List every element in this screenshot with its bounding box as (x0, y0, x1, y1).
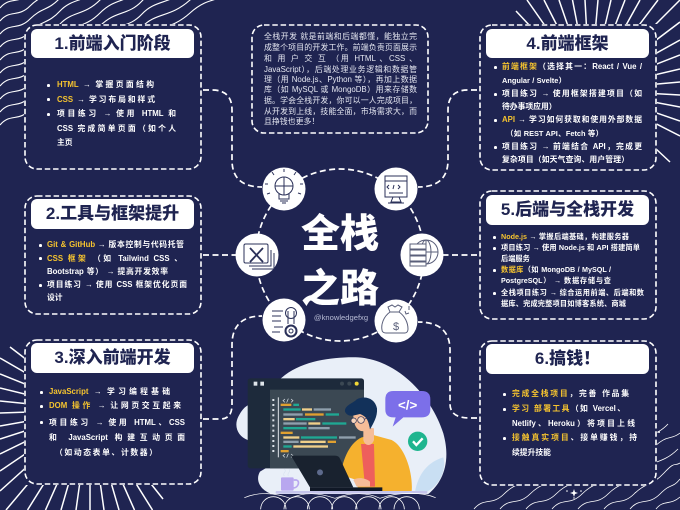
heading: 1 (31, 29, 194, 58)
heading: 6 (486, 344, 649, 374)
plant (415, 457, 444, 493)
panel: 1 frontend basics (24, 24, 202, 170)
panel: 5 backend and full stack: 项目练习 → 使用 Node.js 和 API 搭建简单 (501, 243, 640, 252)
speech bubble (385, 391, 430, 427)
panel: 3 advanced frontend: 项目练习 → 使用 HTML、CSS (49, 418, 185, 426)
panel: 4 frontend frameworks: 项目练习 → 使用框架搭建项目（如 (502, 89, 642, 98)
panel: intro: JavaScript），后端处理业务逻辑和数据管 (264, 65, 417, 74)
heading: 2 (31, 199, 194, 229)
panel: 2 tools and frameworks: 项目练习 → 使用 CSS 框架优化页面 (47, 280, 187, 289)
heading: 2: 2.工具与框架提升 (46, 204, 179, 223)
panel: 1 frontend basics: 项目练习 → 使用 HTML 和 (57, 109, 176, 118)
handle: @knowledgefxg (314, 313, 368, 322)
coffee mug (281, 469, 298, 491)
icon: money bag: $ (393, 321, 399, 333)
panel: 4 frontend frameworks: 待办事项应用） (502, 102, 557, 111)
panel: 5 backend and full stack: Node.js → 掌握后端基础，构建服务器 (501, 232, 629, 241)
panel: 6 make money: 续提升技能 (512, 448, 551, 457)
panel: 1 frontend basics: HTML → 掌握页面结构 (57, 80, 154, 89)
laptop (291, 456, 382, 492)
panel: 5 backend and full stack: 全栈项目练习 → 综合运用前端、后端和数 (501, 288, 644, 297)
panel: 6 make money: 完成全栈项目，完善 作品集 (512, 389, 629, 398)
panel: 2 tools and frameworks: Bootstrap 等） → 提高开发效率 (47, 267, 168, 276)
panel: 6 make money: 接触真实项目、接单赚钱，持 (512, 433, 637, 442)
desk and arcs (244, 491, 436, 509)
panel: intro: 库（如 MySQL 或 MongoDB）用来存储数 (264, 85, 417, 94)
panel: intro: 和 用 户 交 互 （用 HTML 、CSS 、 (264, 54, 417, 63)
panel: 4 frontend frameworks: API → 学习如何获取和使用外部数据 (502, 115, 642, 124)
heading: 5 (486, 195, 649, 225)
speech bubble: </> (398, 397, 418, 412)
person (341, 397, 412, 492)
heading: 4: 4.前端框架 (526, 34, 609, 53)
heading: 3: 3.深入前端开发 (54, 348, 171, 367)
background blob (236, 357, 446, 494)
panel: 1 frontend basics: CSS → 学习布局和样式 (57, 94, 155, 104)
code window (248, 378, 364, 468)
heading: 3 (31, 343, 194, 373)
heading: 1: 1.前端入门阶段 (54, 34, 171, 53)
panel: 4 frontend frameworks: Angular / Svelte） (502, 76, 566, 84)
icon: gear and bulb (262, 298, 306, 342)
main title: 之路 (301, 268, 379, 311)
panel: intro: 全栈开发 就是前端和后端都懂，能独立完 (264, 32, 417, 41)
icon: light bulb (262, 168, 306, 210)
panel: intro: 成整个项目的开发工作。前端负责页面展示 (264, 43, 417, 52)
panel: intro: 据。学会全栈开发，你可以一人完成项目， (264, 96, 417, 105)
icon: code monitor (374, 168, 418, 210)
panel: 4 frontend frameworks: 复杂项目（如天气查询、用户管理） (502, 155, 629, 164)
panel: 5 backend and full stack: 后端服务 (501, 254, 530, 263)
panel: 5 backend and full stack (479, 190, 657, 320)
panel: 2 tools and frameworks: Git & GitHub → 版本控制与代码托管 (47, 240, 184, 249)
panel: 2 tools and frameworks: CSS 框架 （如 Tailwind CSS 、 (47, 254, 182, 262)
panel: 1 frontend basics: 主页 (57, 138, 73, 147)
panel: 5 backend and full stack: 据库、完成完整项目如博客系统、商城 (501, 299, 626, 308)
panel: 6 make money: 学习 部署工具（如 Vercel、 (512, 404, 625, 413)
panel: 3 advanced frontend: DOM 操作 → 让网页交互起来 (49, 401, 181, 410)
panel: 4 frontend frameworks: 前端框架（选择其一：React / Vue / (502, 62, 642, 71)
panel: 4 frontend frameworks (479, 24, 657, 171)
panel: 2 tools and frameworks (24, 195, 202, 315)
panel: intro: 理（用 Node.js、Python 等），再加上数据 (264, 75, 417, 84)
panel: 4 frontend frameworks: 项目练习 → 前端结合 API，完成更 (502, 142, 642, 151)
panel: 3 advanced frontend (24, 339, 202, 485)
panel: 3 advanced frontend: （如动态表单、计数器） (55, 448, 157, 457)
icon: money bag (374, 300, 418, 342)
panel: intro: 且挣钱也更多！ (264, 117, 319, 126)
panel: 6 make money (479, 340, 657, 486)
panel: intro: 从开发到上线，技能全面，市场需求大，而 (264, 107, 417, 116)
icon: tools (236, 234, 278, 276)
heading: 6: 6.搞钱！ (535, 349, 600, 368)
panel: 2 tools and frameworks: 设计 (47, 293, 63, 302)
check badge (408, 432, 427, 451)
icon: server globe (400, 234, 444, 276)
heading: 5: 5.后端与全栈开发 (501, 200, 634, 219)
panel: intro (251, 24, 429, 134)
panel: 3 advanced frontend: JavaScript → 学习编程基础 (49, 387, 170, 396)
panel: 6 make money: Netlify、Heroku）将项目上线 (512, 418, 635, 428)
heading: 4 (486, 29, 649, 58)
panel: 3 advanced frontend: 和 JavaScript 构建互动页面 (49, 433, 185, 442)
panel: 1 frontend basics: CSS 完成简单页面（如个人 (57, 124, 176, 132)
main title: 全栈 (301, 213, 379, 256)
panel: 5 backend and full stack: 数据库（如 MongoDB / MySQL / (501, 265, 611, 274)
panel: 4 frontend frameworks: （如 REST API、Fetch 等） (506, 128, 603, 138)
main title (301, 212, 379, 311)
